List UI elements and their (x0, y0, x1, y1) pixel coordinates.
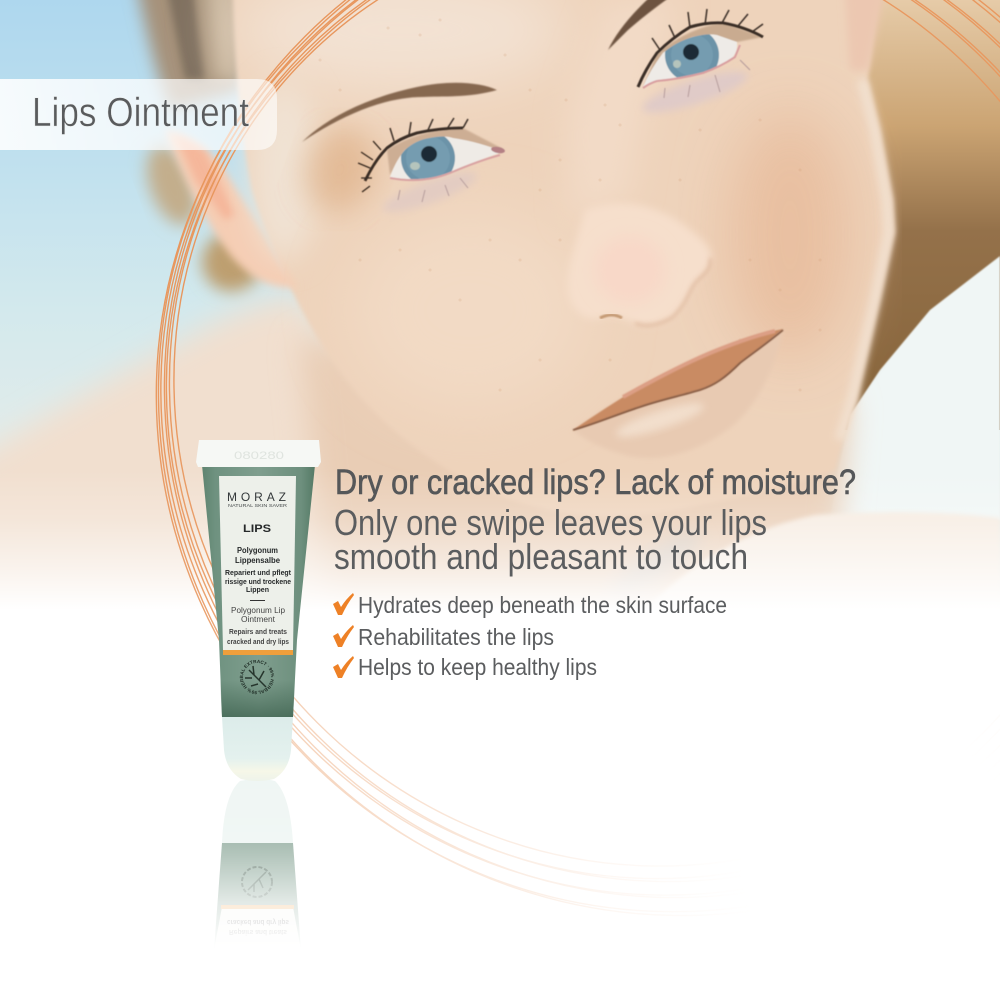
headline: Dry or cracked lips? Lack of moisture? (335, 463, 856, 502)
herbal seal icon (240, 660, 274, 694)
benefit 1: Hydrates deep beneath the skin surface (358, 592, 727, 618)
photo: freckles (320, 20, 820, 390)
benefits list (333, 592, 727, 680)
tube label: cracked and dry lips (227, 639, 289, 646)
photo: right eye (638, 9, 763, 120)
tube bottom shade (220, 680, 295, 717)
tube label: LIPS (243, 523, 271, 535)
tube label: Polygonum Lip (231, 606, 286, 615)
tube label: Lippen (246, 587, 269, 594)
cap embossed code: 080280 (234, 450, 284, 462)
tube label (219, 476, 296, 655)
product: lip ointment tube (196, 440, 321, 781)
title plate (0, 79, 277, 150)
tube label: MORAZ (227, 490, 289, 504)
photo: ear inner glow (180, 150, 234, 220)
photo: left shoulder (0, 291, 322, 558)
photo: nose (568, 203, 711, 325)
photo: right shoulder behind the face (846, 0, 1000, 430)
photo: nose bridge (574, 7, 660, 200)
photo: left eyebrow (302, 83, 497, 142)
photo: hair behind the ear (137, 138, 262, 292)
subheadline: smooth and pleasant to touch (334, 536, 748, 577)
benefit 3: Helps to keep healthy lips (358, 654, 597, 680)
photo: temple light (250, 80, 320, 260)
tube body (202, 465, 315, 717)
tube label: NATURAL SKIN SAVER (228, 503, 288, 508)
photo: arm (674, 512, 998, 588)
photo: face shape (232, 0, 898, 452)
photo: forehead light (230, 0, 570, 90)
benefit 2: Rehabilitates the lips (358, 624, 554, 650)
tube label: Polygonum (237, 546, 278, 555)
photo: hair top (128, 0, 250, 110)
background photo: woman's face (0, 0, 1000, 598)
photo: neck and chest (296, 336, 864, 588)
photo: right eyebrow (608, 0, 670, 50)
decorative orange rings (156, 0, 1000, 916)
subheadline: Only one swipe leaves your lips (334, 502, 767, 543)
photo: ear (165, 130, 297, 288)
photo: cheek right (728, 110, 852, 360)
tube label: Lippensalbe (235, 556, 281, 565)
photo: pillow (830, 256, 1000, 520)
tube label: Repairs and treats (229, 629, 287, 636)
tube label: rissige und trockene (225, 579, 291, 586)
photo: jaw rim (840, 80, 889, 440)
tube cap (196, 440, 321, 467)
tube tip (222, 717, 293, 781)
tube label: Ointment (241, 615, 276, 624)
photo: upper-right face edge (848, 0, 879, 68)
product reflection: Repairs and treats (229, 928, 287, 935)
subheadline (334, 502, 767, 577)
photo: cheek left (386, 243, 554, 377)
product reflection: cracked and dry lips (227, 918, 289, 925)
photo: lips (573, 329, 783, 458)
herbal seal icon: 99% HERBAL EXTRACT · 99% HERBAL EXTRACT (240, 660, 274, 694)
title: Lips Ointment (32, 89, 250, 135)
product reflection (216, 780, 300, 936)
tube label: Repariert und pflegt (225, 570, 292, 577)
photo: white fade at the bottom (0, 495, 1000, 609)
photo: shadow under the chin (660, 540, 690, 558)
photo: left eye (294, 118, 505, 221)
